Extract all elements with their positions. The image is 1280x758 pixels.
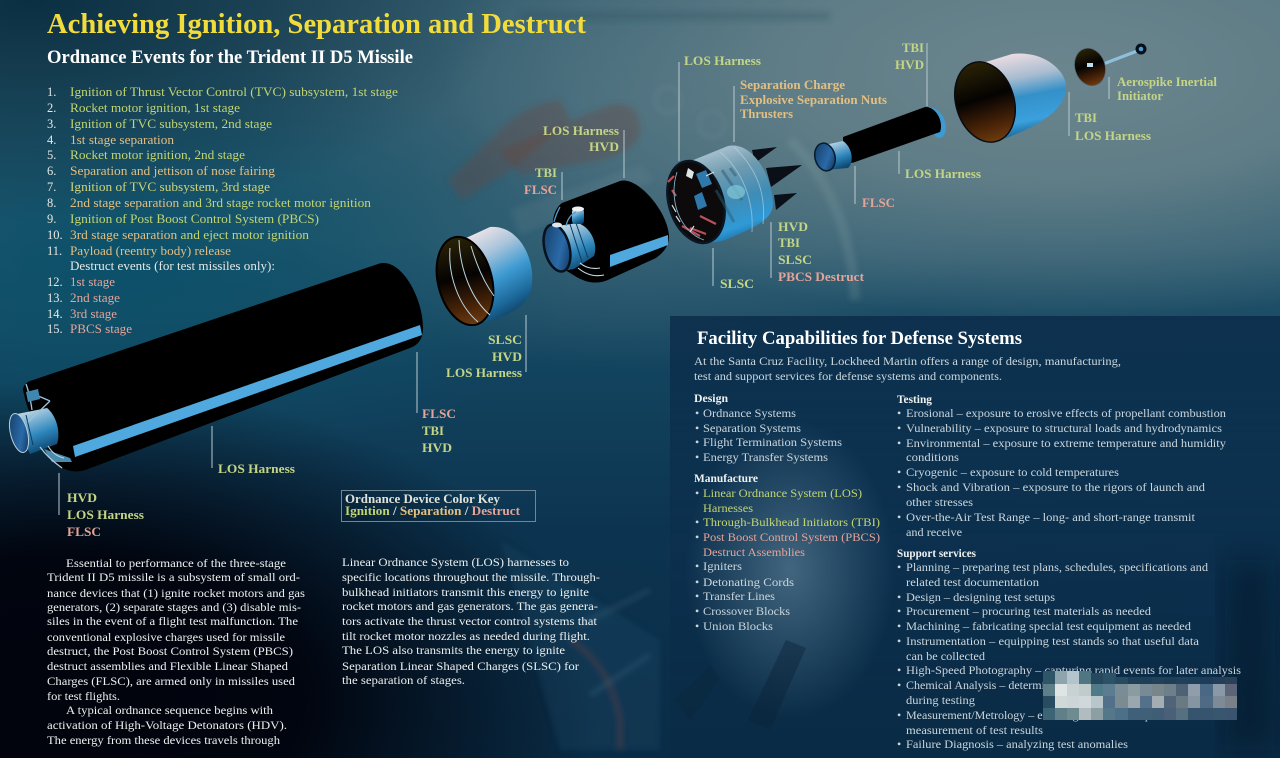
list: manufacture: •: [695, 559, 699, 573]
list: ordnance events: 5.: [47, 148, 56, 162]
callout labels: stage 2: LOS Harness: [543, 124, 619, 138]
list: support services: Failure Diagnosis – analyzing test anomalies: [906, 737, 1128, 751]
callout labels: stage 2: HVD: [589, 140, 619, 154]
list: ordnance events: 13.: [47, 291, 63, 305]
callout labels: post boost section: TBI: [778, 236, 800, 250]
callout labels: nose and aerospike: Initiator: [1117, 89, 1163, 103]
list: support services: Support services: [897, 548, 976, 560]
list: design: •: [695, 435, 699, 449]
legend: ordnance device color key: Ignition / Separation / Destruct: [345, 504, 521, 518]
list: ordnance events: 6.: [47, 164, 56, 178]
list: testing: Shock and Vibration – exposure to the rigors of launch and: [906, 480, 1205, 494]
text block: ordnance description, left column: The energy from these devices travels through: [47, 733, 280, 747]
list: manufacture: Linear Ordnance System (LOS): [703, 486, 862, 500]
list: manufacture: •: [695, 619, 699, 633]
text block: ordnance description, left column: for test flights.: [47, 689, 120, 703]
list: ordnance events: 1st stage separation: [70, 133, 175, 147]
callout labels: post boost section: Thrusters: [740, 107, 793, 121]
callout labels: stage 1: TBI: [422, 424, 444, 438]
icon: aerospike inertial initiator: [1070, 44, 1146, 90]
list: support services: Procurement – procuring test materials as needed: [906, 604, 1151, 618]
list: manufacture: Crossover Blocks: [703, 604, 790, 618]
list: ordnance events: [47, 85, 398, 336]
list: support services: •: [897, 678, 901, 692]
list: support services: Instrumentation – equipping test stands so that useful data: [906, 634, 1200, 648]
missile interstage ring: [428, 227, 532, 331]
callout labels: interstage: SLSC: [488, 333, 522, 347]
text block: ordnance description, right column: rocket motors and gas generators. The gas genera-: [342, 599, 598, 613]
callout labels: stage 2: [524, 124, 624, 200]
icon: stage 2 nozzle: [539, 206, 604, 276]
list: ordnance events: 1st stage: [70, 275, 115, 289]
callout labels: post boost section: LOS Harness: [684, 54, 761, 68]
callout labels: post boost section: [679, 54, 887, 291]
list: manufacture: •: [695, 575, 699, 589]
missile post boost control section with thruster spikes: [658, 146, 802, 250]
list: support services: •: [897, 590, 901, 604]
list: ordnance events: PBCS stage: [70, 322, 132, 336]
panel: facility capabilities backdrop: [670, 316, 1280, 758]
list: support services: Chemical Analysis – determining material composition changes: [906, 678, 1213, 692]
list: ordnance events: Destruct events (for test missiles only):: [70, 259, 275, 273]
list: ordnance events: Rocket motor ignition, 1st stage: [70, 101, 240, 115]
missile stage 3: slim black motor: [812, 107, 946, 173]
list: design: Ordnance Systems: [703, 406, 796, 420]
list: ordnance events: 9.: [47, 212, 56, 226]
text block: ordnance description, left column: Trident II D5 missile is a subsystem of small ord-: [47, 570, 300, 584]
list: testing: •: [897, 510, 901, 524]
list: design: Flight Termination Systems: [703, 435, 842, 449]
list: support services: •: [897, 619, 901, 633]
list: support services: Design – designing test setups: [906, 590, 1055, 604]
list: testing: •: [897, 465, 901, 479]
list: ordnance events: 3rd stage separation and eject motor ignition: [70, 228, 310, 242]
text block: ordnance description, right column: tilt rocket motor nozzles as needed during flight.: [342, 629, 590, 643]
subtitle: Ordnance Events for the Trident II D5 Missile: [47, 47, 413, 68]
list: ordnance events: 2nd stage: [70, 291, 120, 305]
heading: facility capabilities: Facility Capabilities for Defense Systems: [697, 329, 1022, 349]
list: ordnance events: 8.: [47, 196, 56, 210]
list: ordnance events: 3.: [47, 117, 56, 131]
callout labels: nose and aerospike: [1069, 75, 1218, 143]
list: ordnance events: 2.: [47, 101, 56, 115]
list: testing: [897, 394, 1226, 539]
list: manufacture: Detonating Cords: [703, 575, 794, 589]
callout labels: post boost section: HVD: [778, 220, 808, 234]
callout labels: post boost section: SLSC: [720, 277, 754, 291]
list: support services: during testing: [906, 693, 975, 707]
list: support services: •: [897, 604, 901, 618]
list: support services: High-Speed Photography – capturing rapid events for later analysis: [906, 663, 1241, 677]
callout labels: stage 1: LOS Harness: [67, 508, 144, 522]
list: design: Separation Systems: [703, 421, 801, 435]
list: testing: •: [897, 436, 901, 450]
list: manufacture: •: [695, 589, 699, 603]
callout labels: post boost section: Separation Charge: [740, 78, 845, 92]
text block: ordnance description, left column: Charges (FLSC), are armed only in missiles used: [47, 674, 295, 688]
list: testing: •: [897, 406, 901, 420]
list: ordnance events: 3rd stage: [70, 307, 117, 321]
pixelated mosaic watermark: [1043, 671, 1237, 720]
list: support services: Machining – fabricating special test equipment as needed: [906, 619, 1191, 633]
text block: ordnance description, left column: destruct, the Post Boost Control System (PBCS): [47, 644, 293, 658]
list: manufacture: Manufacture: [694, 473, 758, 485]
list: ordnance events: 11.: [47, 244, 62, 258]
list: design: •: [695, 421, 699, 435]
callout labels: stage 1: FLSC: [422, 407, 456, 421]
callout labels: stage 1: FLSC: [67, 525, 101, 539]
list: testing: •: [897, 480, 901, 494]
text block: ordnance description, left column: A typical ordnance sequence begins with: [66, 703, 273, 717]
text block: ordnance description, left column: generators, (2) separate stages and (3) disable mis-: [47, 600, 301, 614]
missile stage 1: long black motor with blue stripe: [6, 263, 423, 471]
text block: ordnance description, left column: activation of High-Voltage Detonators (HDV).: [47, 718, 287, 732]
text block: facility intro: At the Santa Cruz Facility, Lockheed Martin offers a range of design, manufacturing,: [694, 354, 1121, 368]
list: manufacture: Destruct Assemblies: [703, 545, 805, 559]
list: ordnance events: Ignition of TVC subsystem, 2nd stage: [70, 117, 272, 131]
list: ordnance events: 10.: [47, 228, 63, 242]
list: manufacture: •: [695, 515, 699, 529]
list: support services: Planning – preparing test plans, schedules, specifications and: [906, 560, 1208, 574]
callout labels: interstage: HVD: [492, 350, 522, 364]
text block: ordnance description, left column: destruct assemblies and Flexible Linear Shaped: [47, 659, 288, 673]
list: support services: measurement of test results: [906, 723, 1043, 737]
callout labels: post boost section: SLSC: [778, 253, 812, 267]
text block: ordnance description, right column: Linear Ordnance System (LOS) harnesses to: [342, 555, 569, 569]
callout labels: interstage: LOS Harness: [446, 366, 522, 380]
list: support services: •: [897, 737, 901, 751]
callout labels: stage 1: HVD: [67, 491, 97, 505]
list: ordnance events: Ignition of Thrust Vector Control (TVC) subsystem, 1st stage: [70, 85, 398, 99]
list: testing: other stresses: [906, 495, 973, 509]
text block: ordnance description, right column: bulkhead initiators transmit this energy to ignite: [342, 585, 589, 599]
list: testing: Erosional – exposure to erosive effects of propellant combustion: [906, 406, 1226, 420]
text block: ordnance description, left column: [47, 556, 305, 747]
text block: ordnance description, right column: specific locations throughout the missile. Through-: [342, 570, 600, 584]
callout labels: interstage: [446, 315, 526, 380]
text block: ordnance description, right column: The LOS also transmits the energy to ignite: [342, 643, 565, 657]
text block: facility intro: test and support services for defense systems and components.: [694, 369, 1002, 383]
list: design: [694, 393, 842, 464]
list: ordnance events: Ignition of TVC subsystem, 3rd stage: [70, 180, 270, 194]
text block: facility intro: [694, 354, 1121, 383]
icon: stage 1 nozzle and brackets: [6, 384, 72, 468]
list: testing: Environmental – exposure to extreme temperature and humidity: [906, 436, 1226, 450]
list: ordnance events: 15.: [47, 322, 63, 336]
list: manufacture: Through-Bulkhead Initiators (TBI): [703, 515, 880, 529]
list: support services: •: [897, 708, 901, 722]
missile nose fairing: [945, 54, 1066, 150]
text block: ordnance description, right column: tors activate the thrust vector control systems that: [342, 614, 598, 628]
list: manufacture: •: [695, 486, 699, 500]
callout labels: post boost section: PBCS Destruct: [778, 270, 865, 284]
list: support services: related test documentation: [906, 575, 1039, 589]
text block: ordnance description, left column: nance devices that (1) ignite rocket motors and gas: [47, 586, 305, 600]
list: manufacture: Transfer Lines: [703, 589, 775, 603]
list: testing: Testing: [897, 394, 932, 406]
legend: ordnance device color key: Ordnance Device Color Key: [345, 492, 501, 506]
list: testing: Cryogenic – exposure to cold temperatures: [906, 465, 1119, 479]
missile stage 2: black motor with nozzle: [539, 181, 669, 283]
list: manufacture: •: [695, 530, 699, 544]
list: manufacture: Post Boost Control System (PBCS): [703, 530, 880, 544]
text block: ordnance description, left column: siles in the event of a flight test malfunction. The: [47, 614, 298, 628]
callout labels: stage 3: TBI: [902, 41, 924, 55]
list: support services: [897, 548, 1241, 751]
list: manufacture: [694, 473, 880, 633]
text block: ordnance description, right column: [342, 555, 600, 687]
text block: ordnance description, left column: Essential to performance of the three-stage: [66, 556, 286, 570]
list: manufacture: Harnesses: [703, 501, 753, 515]
list: ordnance events: 12.: [47, 275, 63, 289]
callout labels: stage 1: LOS Harness: [218, 462, 295, 476]
legend: ordnance device color key: [342, 490, 536, 522]
callout labels: stage 3: LOS Harness: [905, 167, 981, 181]
title: Achieving Ignition, Separation and Destruct: [47, 9, 587, 40]
text block: ordnance description, right column: the separation of stages.: [342, 673, 465, 687]
list: support services: •: [897, 634, 901, 648]
text block: ordnance description, left column: conventional explosive charges used for missile: [47, 630, 285, 644]
callout labels: nose and aerospike: Aerospike Inertial: [1117, 75, 1218, 89]
icon: circuit board face: [658, 154, 734, 250]
callout labels: stage 2: FLSC: [524, 183, 557, 197]
callout labels: stage 1: HVD: [422, 441, 452, 455]
list: manufacture: Igniters: [703, 559, 742, 573]
list: design: Design: [694, 393, 729, 405]
list: manufacture: •: [695, 604, 699, 618]
text block: ordnance description, right column: Separation Linear Shaped Charges (SLSC) for: [342, 659, 579, 673]
list: testing: and receive: [906, 525, 962, 539]
list: support services: •: [897, 663, 901, 677]
callout labels: nose and aerospike: LOS Harness: [1075, 129, 1151, 143]
callout labels: stage 1: [59, 352, 456, 539]
list: design: Energy Transfer Systems: [703, 450, 828, 464]
list: design: •: [695, 406, 699, 420]
list: testing: Over-the-Air Test Range – long- and short-range transmit: [906, 510, 1196, 524]
callout labels: stage 3: HVD: [895, 58, 924, 72]
list: support services: can be collected: [906, 649, 985, 663]
list: ordnance events: Separation and jettison of nose fairing: [70, 164, 276, 178]
list: ordnance events: Ignition of Post Boost Control System (PBCS): [70, 212, 319, 226]
list: ordnance events: 14.: [47, 307, 63, 321]
list: ordnance events: Rocket motor ignition, 2nd stage: [70, 148, 245, 162]
callout labels: stage 3: FLSC: [862, 196, 895, 210]
list: support services: Measurement/Metrology – ensuring accurate and precise: [906, 708, 1179, 722]
list: testing: conditions: [906, 450, 959, 464]
callout labels: nose and aerospike: TBI: [1075, 111, 1097, 125]
list: ordnance events: 4.: [47, 133, 56, 147]
list: ordnance events: Payload (reentry body) release: [70, 244, 231, 258]
list: ordnance events: 2nd stage separation and 3rd stage rocket motor ignition: [70, 196, 372, 210]
callout labels: post boost section: Explosive Separation Nuts: [740, 93, 887, 107]
list: ordnance events: 1.: [47, 85, 56, 99]
callout labels: stage 3: [855, 41, 981, 210]
list: ordnance events: 7.: [47, 180, 56, 194]
list: manufacture: Union Blocks: [703, 619, 773, 633]
list: testing: •: [897, 421, 901, 435]
callout labels: stage 2: TBI: [535, 166, 557, 180]
list: testing: Vulnerability – exposure to structural loads and hydrodynamics: [906, 421, 1222, 435]
list: design: •: [695, 450, 699, 464]
backdrop machinery details: [448, 12, 855, 750]
list: support services: •: [897, 560, 901, 574]
